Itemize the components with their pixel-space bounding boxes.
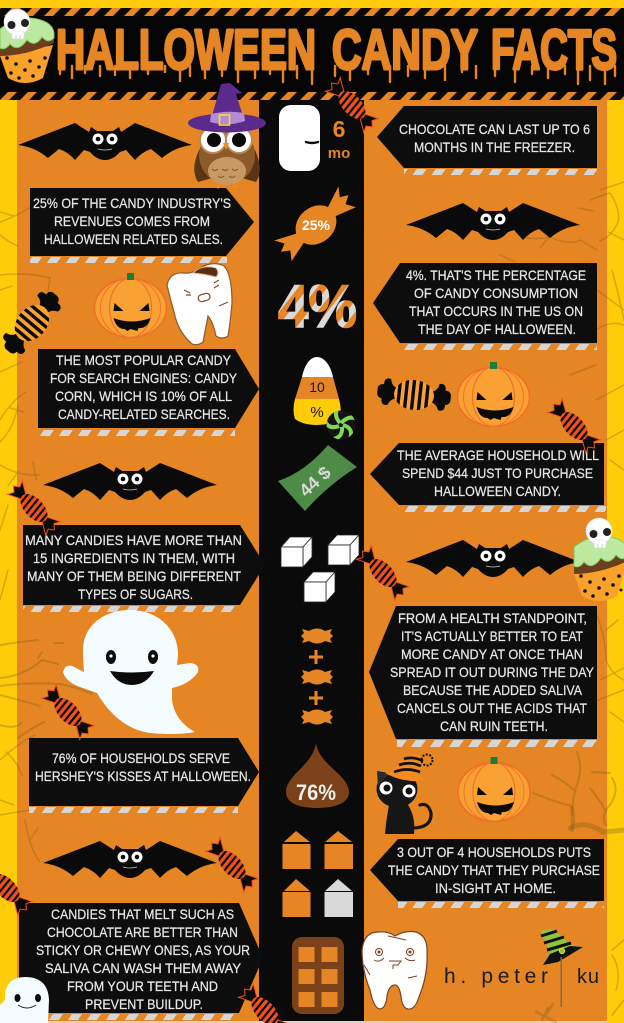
icon: cupcake with skull, right [574,518,624,601]
yellow striped candy, left [0,285,67,361]
panel: health standpoint fact [369,606,597,747]
pumpkin 1 [94,273,166,338]
title: CANDY [332,18,478,82]
consumption fact text: THAT OCCURS IN THE US ON [409,303,583,319]
title [56,18,617,84]
bottom edge line [17,1021,607,1023]
revenue fact text: REVENUES COMES FROM [54,213,210,229]
icon: candy corn 10%: 10 [309,379,325,395]
icon: candy corn 10%: % [310,404,324,421]
bat 5 [43,841,217,878]
pumpkin 2 [458,362,530,426]
revenue fact text [33,195,231,247]
witch hat [188,114,266,132]
red candy, by bat [203,836,261,894]
label: 6 months [328,116,350,162]
red candy, left edge [5,479,63,537]
title: HALLOWEEN [56,18,316,82]
icon: owl in witch hat [188,83,266,189]
health fact text: BECAUSE THE ADDED SALIVA [403,682,583,698]
right yellow side band [607,0,624,1023]
bat 1 [18,123,192,160]
logo: author name: h. peter [444,965,548,988]
health fact text: SPREAD IT OUT DURING THE DAY [390,664,595,680]
health fact text: IT'S ACTUALLY BETTER TO EAT [401,628,583,644]
kisses fact text [35,750,251,784]
in-sight fact text: 3 OUT OF 4 HOUSEHOLDS PUTS [397,844,591,860]
panel: candy in sight fact [370,839,604,908]
health fact text: CAN RUIN TEETH. [440,718,548,734]
red candy, left clipped [0,859,35,917]
owl eyes [200,127,226,153]
striped hat [385,755,427,781]
yellow striped candy, right [376,375,452,415]
consumption fact text: THE DAY OF HALLOWEEN. [418,321,576,337]
top yellow band [0,0,624,8]
bat 2 [406,203,580,240]
owl wings [194,150,260,182]
candy corn fact text: CANDY-RELATED SEARCHES. [58,406,230,422]
kisses fact text: HERSHEY'S KISSES AT HALLOWEEN. [35,768,251,784]
in-sight fact text: THE CANDY THAT THEY PURCHASE [388,862,600,878]
consumption fact text: 4%. THAT'S THE PERCENTAGE [406,267,586,283]
logo: author name [444,957,599,1007]
consumption fact text: OF CANDY CONSUMPTION [414,285,578,301]
icon: cupcake with skull, top left [0,9,54,83]
ingredients fact text [25,532,242,602]
melting fact text: PREVENT BUILDUP. [85,996,203,1012]
icon: chocolate bar [292,937,344,1014]
cat head [376,770,418,808]
pumpkin 3 [458,757,530,822]
label: 6 months: 6 [333,116,345,142]
panel: consumption percentage fact [373,263,597,350]
icon: 25% wrapped candy [271,183,361,267]
icon: happy tooth [362,932,427,1009]
red candy, by ghost [39,683,97,741]
candy corn fact text: FOR SEARCH ENGINES: CANDY [50,370,238,386]
icon: dollar bill $44 [278,445,357,511]
header banner [0,8,624,100]
panel: industry revenue fact [30,188,254,263]
ingredients fact text: MANY CANDIES HAVE MORE THAN [25,532,242,548]
panel: ingredients fact [23,525,265,612]
icon: 25% wrapped candy: 25% [302,217,331,233]
panel: chocolate freezer fact [377,106,597,175]
panel: household spending fact [370,443,606,512]
melting fact text: CHOCOLATE ARE BETTER THAN [47,924,238,940]
candy corn fact text: CORN, WHICH IS 10% OF ALL [55,388,232,404]
spending fact text: SPEND $44 JUST TO PURCHASE [402,465,593,481]
ingredients fact text: TYPES OF SUGARS. [78,586,193,602]
ingredients fact text: MANY OF THEM BEING DIFFERENT [27,568,241,584]
icon: small ghost [0,977,49,1023]
health fact text: MORE CANDY AT ONCE THAN [401,646,583,662]
candy corn fact text: THE MOST POPULAR CANDY [56,352,232,368]
red candy, beside pumpkin [545,397,603,455]
icon: dollar bill $44: 44 $ [295,462,335,501]
red candy, top [323,76,381,134]
icon: freezer [279,105,320,171]
icon: ghost [63,610,198,734]
chocolate fact text: CHOCOLATE CAN LAST UP TO 6 [399,121,590,137]
revenue fact text: 25% OF THE CANDY INDUSTRY'S [33,195,231,211]
red candy, bottom [236,982,294,1023]
in-sight fact text: IN-SIGHT AT HOME. [435,880,556,896]
spending fact text: HALLOWEEN CANDY. [434,483,561,499]
ingredients fact text: 15 INGREDIENTS IN THEM, WITH [33,550,235,566]
stat: 4% striped: 4% [278,273,357,340]
candy corn fact text [50,352,238,422]
banner black band [0,16,624,92]
bat 3 [43,463,217,500]
revenue fact text: HALLOWEEN RELATED SALES. [44,231,223,247]
icon: chocolate kiss 76%: 76% [296,780,336,805]
icon: black cat with striped hat [376,754,432,834]
panel: candy corn search fact [38,349,259,436]
logo: author name: ku [577,966,599,988]
cat body [385,800,414,834]
red candy, by sugar cubes [354,544,412,602]
icon: chocolate kiss 76% [286,743,349,808]
melting fact text: SALIVA CAN WASH THEM AWAY [45,960,242,976]
consumption fact text [406,267,586,337]
cat tail [412,804,431,828]
bottom hazard stripe [0,92,624,100]
icon: decayed tooth [167,264,232,345]
spending fact text: THE AVERAGE HOUSEHOLD WILL [397,447,599,463]
spending fact text [397,447,599,499]
melting fact text: FROM YOUR TEETH AND [67,978,218,994]
health fact text: CANCELS OUT THE ACIDS THAT [397,700,587,716]
chocolate fact text [399,121,590,155]
kisses fact text: 76% OF HOUSEHOLDS SERVE [52,750,230,766]
in-sight fact text [388,844,600,896]
health fact text: FROM A HEALTH STANDPOINT, [398,610,587,626]
chocolate fact text: MONTHS IN THE FREEZER. [414,139,575,155]
left yellow side band [0,0,17,1023]
panel: Hershey's kisses fact [29,738,259,813]
logo: witch hat [541,929,583,965]
icon: candy corn 10% [294,357,341,425]
icon: candy plus candy plus candy [301,628,333,724]
melting fact text: CANDIES THAT MELT SUCH AS [51,906,234,922]
panel: melting candy fact [19,903,263,1020]
label: 6 months: mo [328,145,350,162]
melting fact text [36,906,250,1012]
icon: four houses, three in orange [282,831,353,917]
top hazard stripe [0,8,624,16]
health fact text [390,610,595,734]
icon: sugar cubes [281,535,359,602]
bat 4 [406,540,580,577]
center black column [259,100,364,1021]
melting fact text: STICKY OR CHEWY ONES, AS YOUR [36,942,250,958]
owl body [199,126,255,184]
icon: green swirl candy [326,410,355,440]
